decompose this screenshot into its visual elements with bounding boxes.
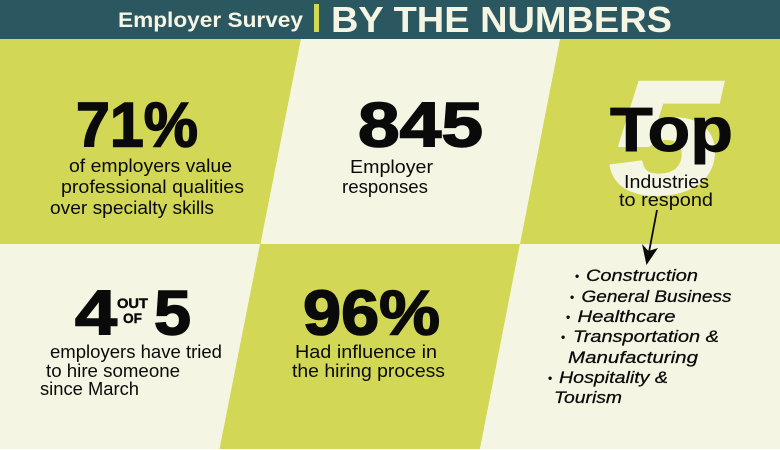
description: industries to respond: Industries — [624, 172, 709, 192]
panel: 845 responses — [260, 39, 560, 244]
list: industries: Tourism — [554, 388, 622, 407]
list: industries: • — [548, 371, 552, 385]
description: employer responses: Employer — [350, 157, 433, 177]
list: industries: Construction — [586, 266, 698, 285]
description: industries to respond: to respond — [619, 190, 713, 210]
description: industries to respond — [619, 172, 713, 210]
stat: 4 out of 5: OUT — [117, 295, 148, 311]
stat: 96%: 96% — [303, 278, 440, 348]
list: industries: • — [566, 310, 570, 324]
description: tried to hire — [40, 342, 222, 399]
list: industries — [548, 266, 732, 407]
panel: 4 out of 5 — [0, 244, 260, 449]
list: industries: • — [570, 290, 574, 304]
list: industries: Hospitality & — [559, 368, 668, 387]
stat: 4 out of 5 — [75, 278, 191, 348]
description: professional qualities: over specialty skills — [50, 198, 214, 218]
list: industries: Healthcare — [578, 307, 676, 326]
description: hiring influence: Had influence in — [295, 342, 437, 362]
description: professional qualities — [50, 156, 244, 218]
list: industries: • — [575, 269, 579, 283]
description: professional qualities: professional qualities — [61, 177, 244, 197]
stat: 71%: 71% — [76, 90, 198, 160]
description: hiring influence — [292, 342, 445, 381]
description: tried to hire: since March — [40, 379, 139, 399]
description: tried to hire: employers have tried — [50, 342, 222, 362]
header label: Employer Survey — [118, 9, 303, 32]
list: industries: General Business — [582, 287, 732, 306]
header divider — [314, 4, 319, 32]
description: tried to hire: to hire someone — [46, 361, 180, 381]
header banner — [0, 0, 780, 40]
stat: 4 out of 5: OF — [123, 310, 142, 326]
decorative numeral 5: 5 — [611, 50, 722, 226]
panel: 96 percent — [220, 244, 520, 449]
stat: 4 out of 5: 4 — [75, 278, 117, 348]
list: industries: Manufacturing — [568, 348, 699, 367]
arrow: top 5 to list — [642, 210, 658, 265]
stat: 845: 845 — [358, 90, 483, 160]
panel: 71 percent — [0, 39, 301, 244]
title: BY THE NUMBERS — [331, 0, 672, 40]
panel: top 5 industries — [520, 39, 780, 244]
description: employer responses: responses — [342, 177, 428, 197]
list: industries: Transportation & — [573, 327, 719, 346]
description: professional qualities: of employers value — [69, 156, 232, 176]
description: hiring influence: the hiring process — [292, 361, 445, 381]
stat: 4 out of 5: 5 — [154, 278, 191, 348]
stat: Top: Top — [610, 96, 733, 165]
description: employer responses — [342, 157, 433, 197]
panel: industry list — [480, 244, 780, 449]
list: industries: • — [561, 330, 565, 344]
